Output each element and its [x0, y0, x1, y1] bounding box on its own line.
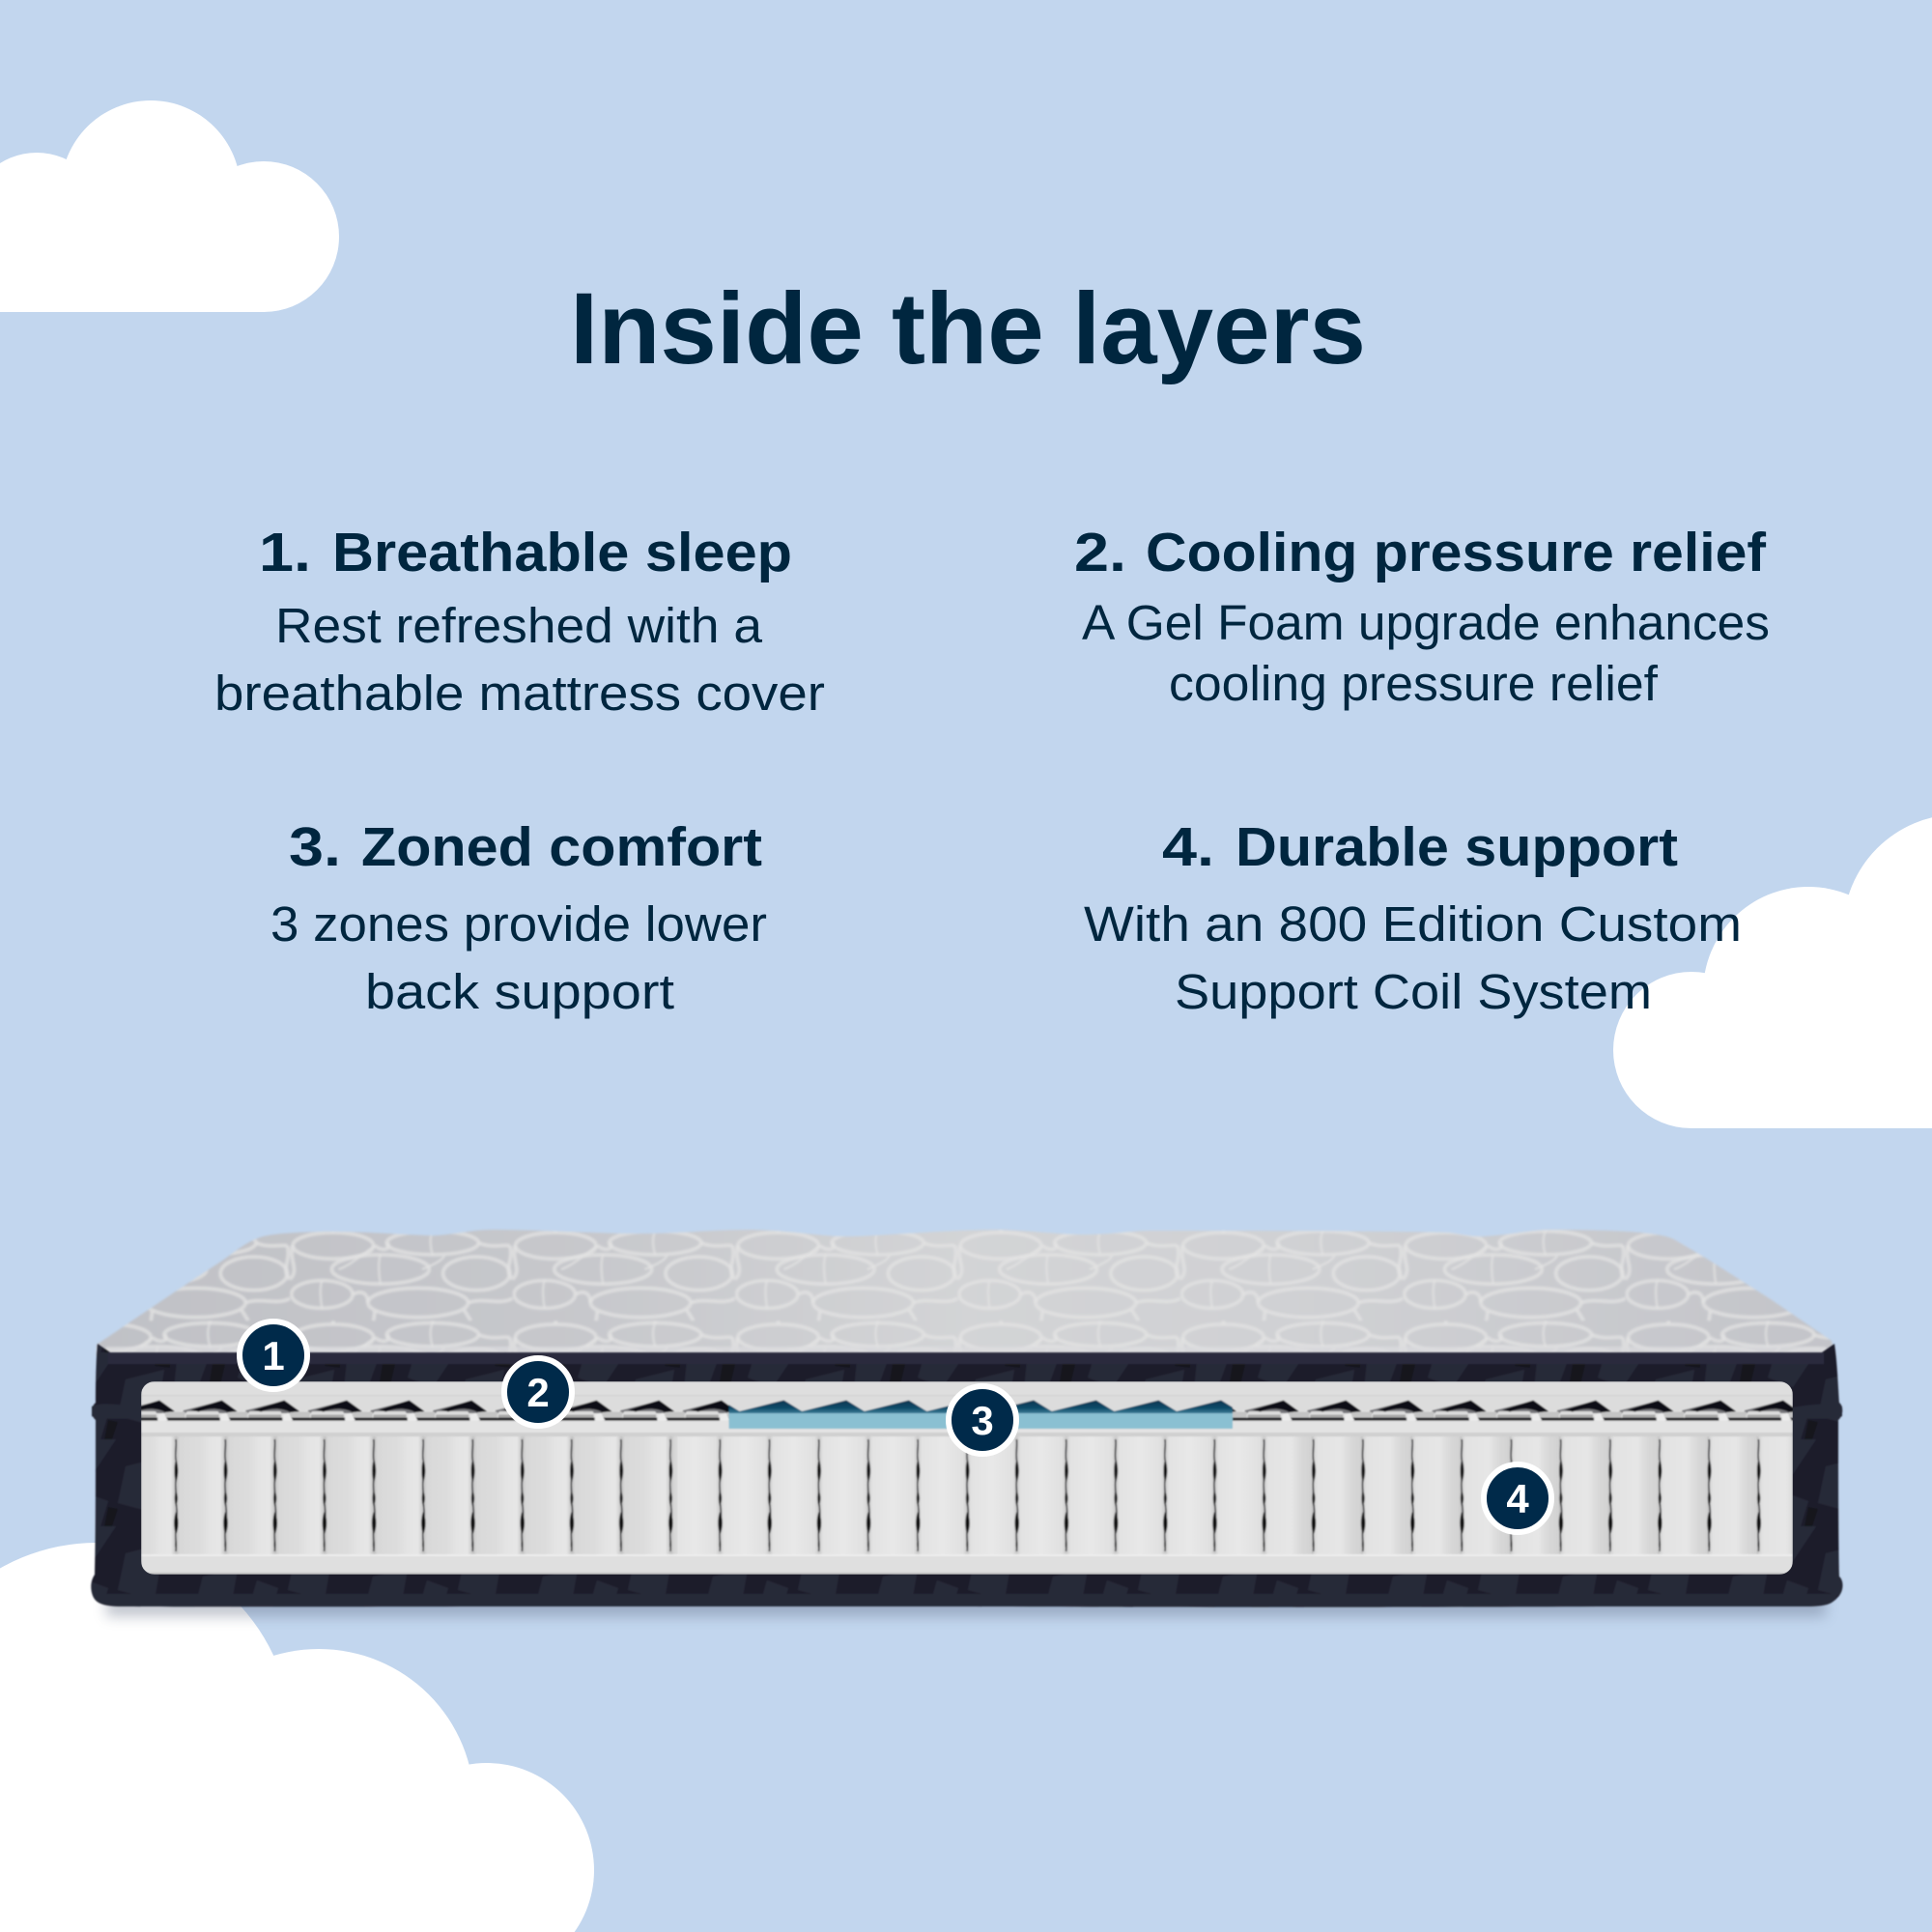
heading: 1: Breathable sleep: [332, 522, 792, 583]
text block: 1 breathable sleep: [214, 522, 825, 721]
body: 4: Support Coil System: [1175, 964, 1652, 1019]
bottom piping: [95, 1594, 1837, 1606]
badge 3: [949, 1386, 1016, 1454]
body: 1: [214, 598, 825, 721]
text block: 3 zoned comfort: [270, 816, 767, 1019]
layer: base under filter: [141, 1381, 1793, 1575]
badge 3: 3: [971, 1398, 994, 1443]
heading: 2: 2.: [1074, 522, 1126, 583]
side piping right: [1793, 1404, 1842, 1419]
badge 4: 4: [1506, 1476, 1529, 1521]
mattress top surface: [97, 1230, 1835, 1356]
text block: 4 durable support: [1084, 816, 1742, 1019]
badge 4: [1484, 1464, 1551, 1532]
side piping left: [92, 1404, 141, 1419]
badge 2: 2: [526, 1370, 550, 1415]
heading: 2: Cooling pressure relief: [1146, 522, 1767, 583]
body: 2: A Gel Foam upgrade enhances: [1082, 595, 1770, 650]
body: 4: [1084, 896, 1742, 1019]
badge 1: [240, 1321, 307, 1389]
cloud: bottom left: [0, 1543, 594, 1932]
heading: 3: Zoned comfort: [361, 816, 762, 878]
top piping: [108, 1352, 1824, 1364]
layer: pocketed coils: [141, 1436, 1793, 1554]
mattress illustration: [91, 1230, 1843, 1616]
layer: breathable cover foam: [141, 1395, 1793, 1396]
body: 3: [270, 896, 767, 1019]
layer: foam egg crate: [141, 1399, 1793, 1422]
title: Inside the layers: [570, 272, 1366, 385]
heading: 1: 1.: [259, 522, 311, 583]
body: 1: breathable mattress cover: [214, 666, 825, 721]
badge 1: 1: [262, 1333, 285, 1378]
shadow under mattress: [106, 1599, 1826, 1616]
body: 4: With an 800 Edition Custom: [1084, 896, 1742, 952]
cloud: top left: [0, 100, 339, 312]
heading: 4: Durable support: [1236, 816, 1678, 878]
body: 1: Rest refreshed with a: [275, 598, 763, 653]
body: 2: [1082, 595, 1770, 711]
body: 2: cooling pressure relief: [1169, 656, 1659, 711]
text block: 2 cooling pressure relief: [1074, 522, 1770, 711]
layer: base foam: [141, 1554, 1793, 1575]
layer: lower foam: [141, 1433, 1793, 1436]
cutaway layers: [141, 1381, 1793, 1575]
heading: 3: 3.: [289, 816, 341, 878]
cloud: right: [1613, 814, 1932, 1128]
layer: gel foam: [728, 1396, 1233, 1429]
body: 3: 3 zones provide lower: [270, 896, 767, 952]
badge 2: [504, 1358, 572, 1426]
heading: 4: 4.: [1162, 816, 1214, 878]
mattress dark fabric side: [91, 1344, 1843, 1607]
body: 3: back support: [365, 964, 674, 1019]
